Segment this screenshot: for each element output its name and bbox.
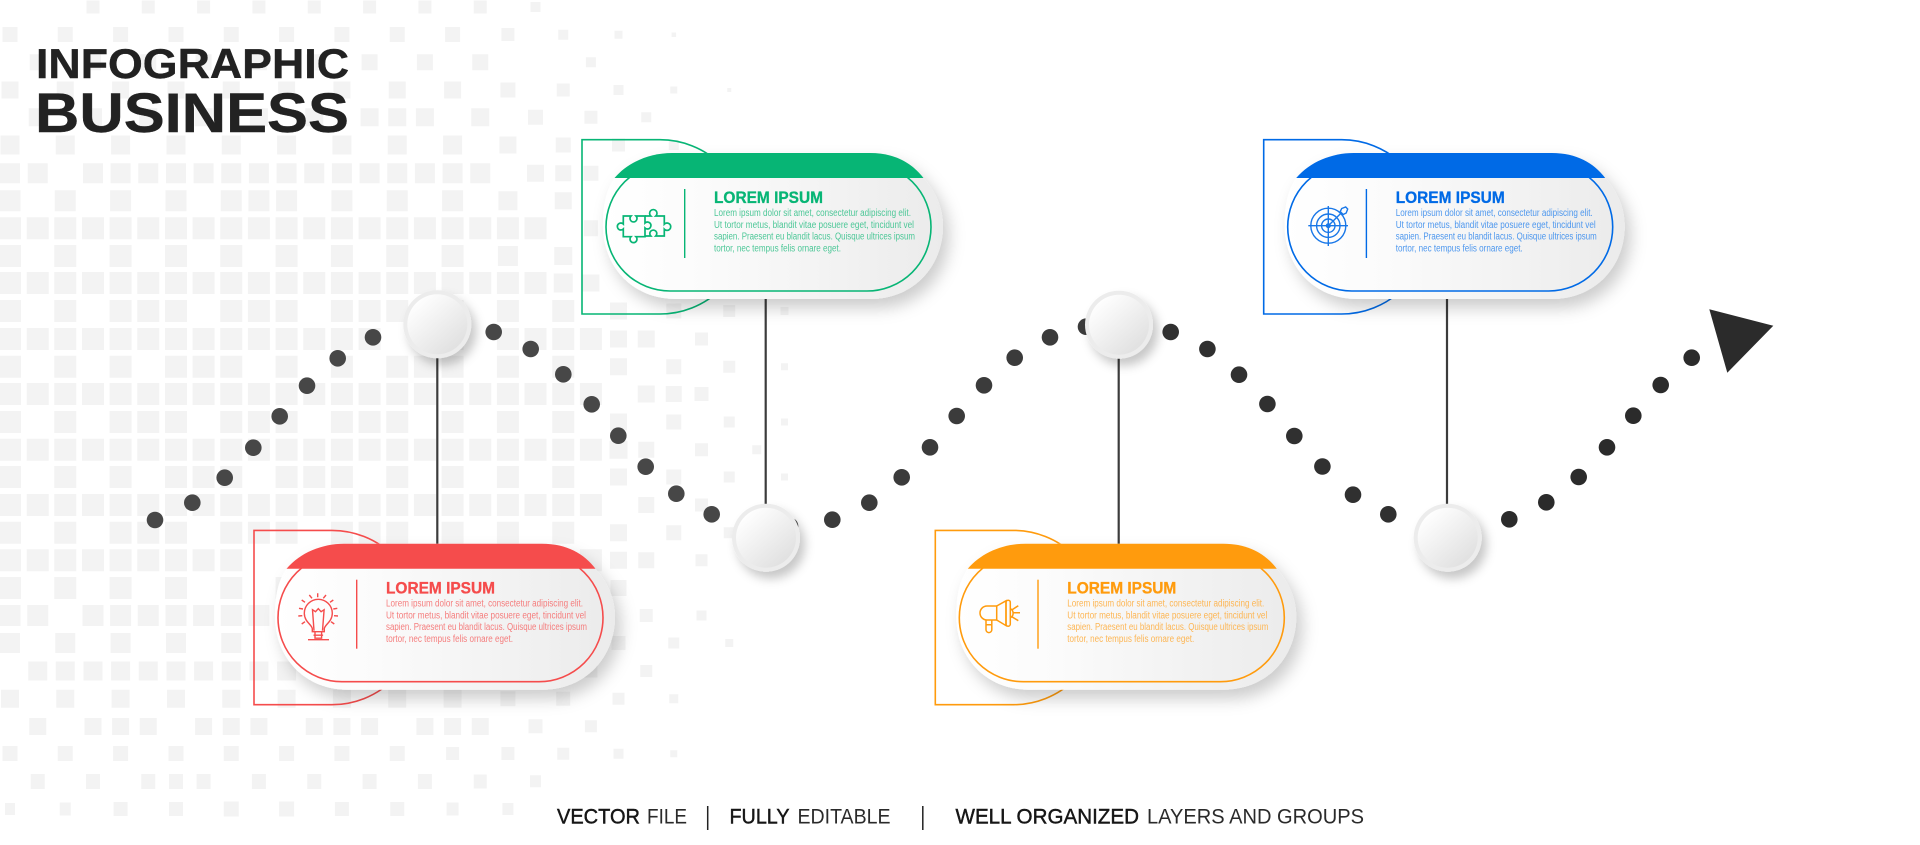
orange heading: LOREM IPSUM <box>1067 580 1176 598</box>
blue text block: Lorem ipsum dolor sit amet, consectetur adipiscing elit. <box>1396 208 1593 219</box>
title: INFOGRAPHIC <box>36 40 349 87</box>
blue text block: sapien. Praesent eu blandit lacus. Quisque ultrices ipsum <box>1396 232 1597 242</box>
orange text block: Lorem ipsum dolor sit amet, consectetur adipiscing elit. <box>1067 599 1264 610</box>
red heading: LOREM IPSUM <box>386 580 495 598</box>
icon: megaphone <box>980 600 1020 633</box>
red text block: Lorem ipsum dolor sit amet, consectetur adipiscing elit. <box>386 599 583 610</box>
red text block <box>386 599 587 645</box>
footer tagline: FULLY <box>730 804 790 828</box>
footer tagline: EDITABLE <box>798 804 890 828</box>
orange divider <box>1037 580 1039 649</box>
blue text block: Ut tortor metus, blandit vitae posuere eget, tincidunt vel <box>1396 220 1596 231</box>
red header band <box>286 544 596 569</box>
orange inner outline <box>959 554 1284 682</box>
connector lines <box>437 295 1447 546</box>
node: step 1 <box>403 290 471 358</box>
blue text block: tortor, nec tempus felis ornare eget. <box>1396 243 1523 254</box>
green divider <box>684 189 686 258</box>
red inner outline <box>278 554 603 682</box>
icon: target <box>1308 206 1348 246</box>
orange card body <box>956 544 1296 690</box>
footer tagline: FILE <box>647 804 687 828</box>
green frame <box>582 140 747 314</box>
blue inner outline <box>1288 163 1613 291</box>
arrow head <box>1709 309 1773 373</box>
green card body <box>603 153 943 299</box>
blue divider <box>1365 189 1367 258</box>
blue frame <box>1264 140 1429 314</box>
green text block: Ut tortor metus, blandit vitae posuere eget, tincidunt vel <box>714 220 914 231</box>
green text block: sapien. Praesent eu blandit lacus. Quisque ultrices ipsum <box>714 232 915 242</box>
footer tagline <box>557 804 1364 830</box>
blue text block <box>1396 208 1597 254</box>
icon: light bulb <box>298 593 338 640</box>
dotted path <box>147 318 1700 534</box>
blue heading: LOREM IPSUM <box>1396 189 1505 207</box>
orange text block: Ut tortor metus, blandit vitae posuere eget, tincidunt vel <box>1067 611 1267 622</box>
blue card body <box>1285 153 1625 299</box>
orange text block: tortor, nec tempus felis ornare eget. <box>1067 634 1194 645</box>
panel: red card <box>254 530 615 705</box>
panel: blue card <box>1264 140 1625 314</box>
red text block: tortor, nec tempus felis ornare eget. <box>386 634 513 645</box>
node: step 2 <box>732 504 800 572</box>
blue header band <box>1296 153 1605 178</box>
footer tagline: VECTOR <box>557 804 640 828</box>
orange text block: sapien. Praesent eu blandit lacus. Quisque ultrices ipsum <box>1067 622 1268 633</box>
title <box>35 40 349 144</box>
green header band <box>614 153 924 178</box>
green text block: tortor, nec tempus felis ornare eget. <box>714 243 841 254</box>
orange header band <box>968 544 1277 569</box>
green text block <box>714 208 915 254</box>
icon: puzzle pieces <box>617 210 671 243</box>
panel: orange card <box>935 530 1296 705</box>
node: step 4 <box>1414 504 1482 572</box>
node: step 3 <box>1085 291 1153 359</box>
red divider <box>356 580 358 649</box>
green inner outline <box>606 163 931 291</box>
panel: green card <box>582 140 943 314</box>
green text block: Lorem ipsum dolor sit amet, consectetur adipiscing elit. <box>714 208 911 219</box>
green heading: LOREM IPSUM <box>714 189 823 207</box>
red card body <box>275 544 615 690</box>
red text block: Ut tortor metus, blandit vitae posuere eget, tincidunt vel <box>386 611 586 622</box>
orange text block <box>1067 599 1268 645</box>
footer tagline: LAYERS AND GROUPS <box>1147 804 1364 828</box>
red frame <box>254 530 419 705</box>
orange frame <box>935 530 1100 705</box>
red text block: sapien. Praesent eu blandit lacus. Quisque ultrices ipsum <box>386 622 587 633</box>
title: BUSINESS <box>35 81 349 144</box>
footer tagline: WELL ORGANIZED <box>956 804 1139 828</box>
